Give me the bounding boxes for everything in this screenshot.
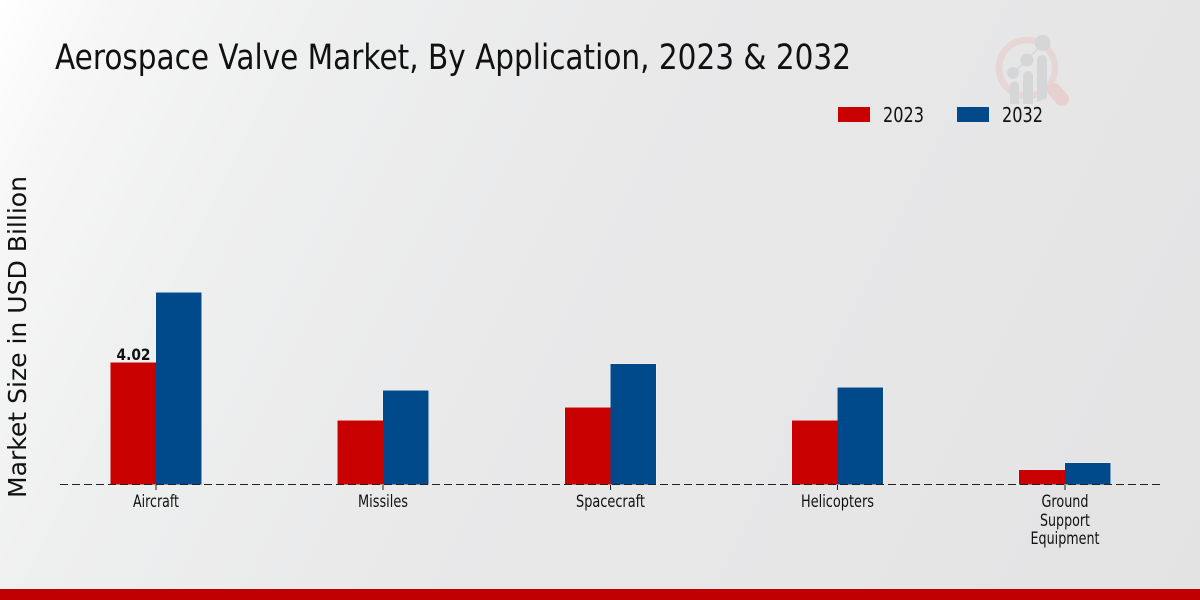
x axis baseline	[60, 484, 1160, 490]
legend item: 2023	[838, 103, 924, 127]
x axis category labels: Missiles	[358, 492, 408, 512]
group: Helicopters	[792, 387, 884, 484]
group: Ground Support Equipment	[1018, 462, 1111, 484]
group: Spacecraft	[564, 364, 656, 484]
y axis label: Market Size in USD Billion	[3, 176, 32, 498]
bar chart	[110, 292, 1111, 484]
x axis category labels: Helicopters	[801, 492, 874, 512]
group: Aircraft	[110, 292, 202, 484]
legend item: 2032: 2032	[1002, 103, 1043, 127]
x axis category labels	[133, 492, 1100, 549]
x axis category labels: Support	[1040, 511, 1090, 531]
legend	[838, 103, 1043, 127]
legend item: 2023: 2023	[883, 103, 924, 127]
x axis category labels: Aircraft	[133, 492, 179, 512]
value label: 4.02	[116, 345, 150, 364]
icon: magnifier logo watermark	[999, 35, 1062, 104]
legend item: 2032	[957, 103, 1043, 127]
title: Aerospace Valve Market, By Application, 2023 & 2032	[55, 38, 851, 78]
x axis category labels: Equipment	[1030, 529, 1100, 549]
footer bar	[0, 589, 1200, 600]
group: Missiles	[337, 390, 429, 484]
x axis category labels: Spacecraft	[576, 492, 645, 512]
x axis category labels: Ground	[1042, 492, 1088, 512]
